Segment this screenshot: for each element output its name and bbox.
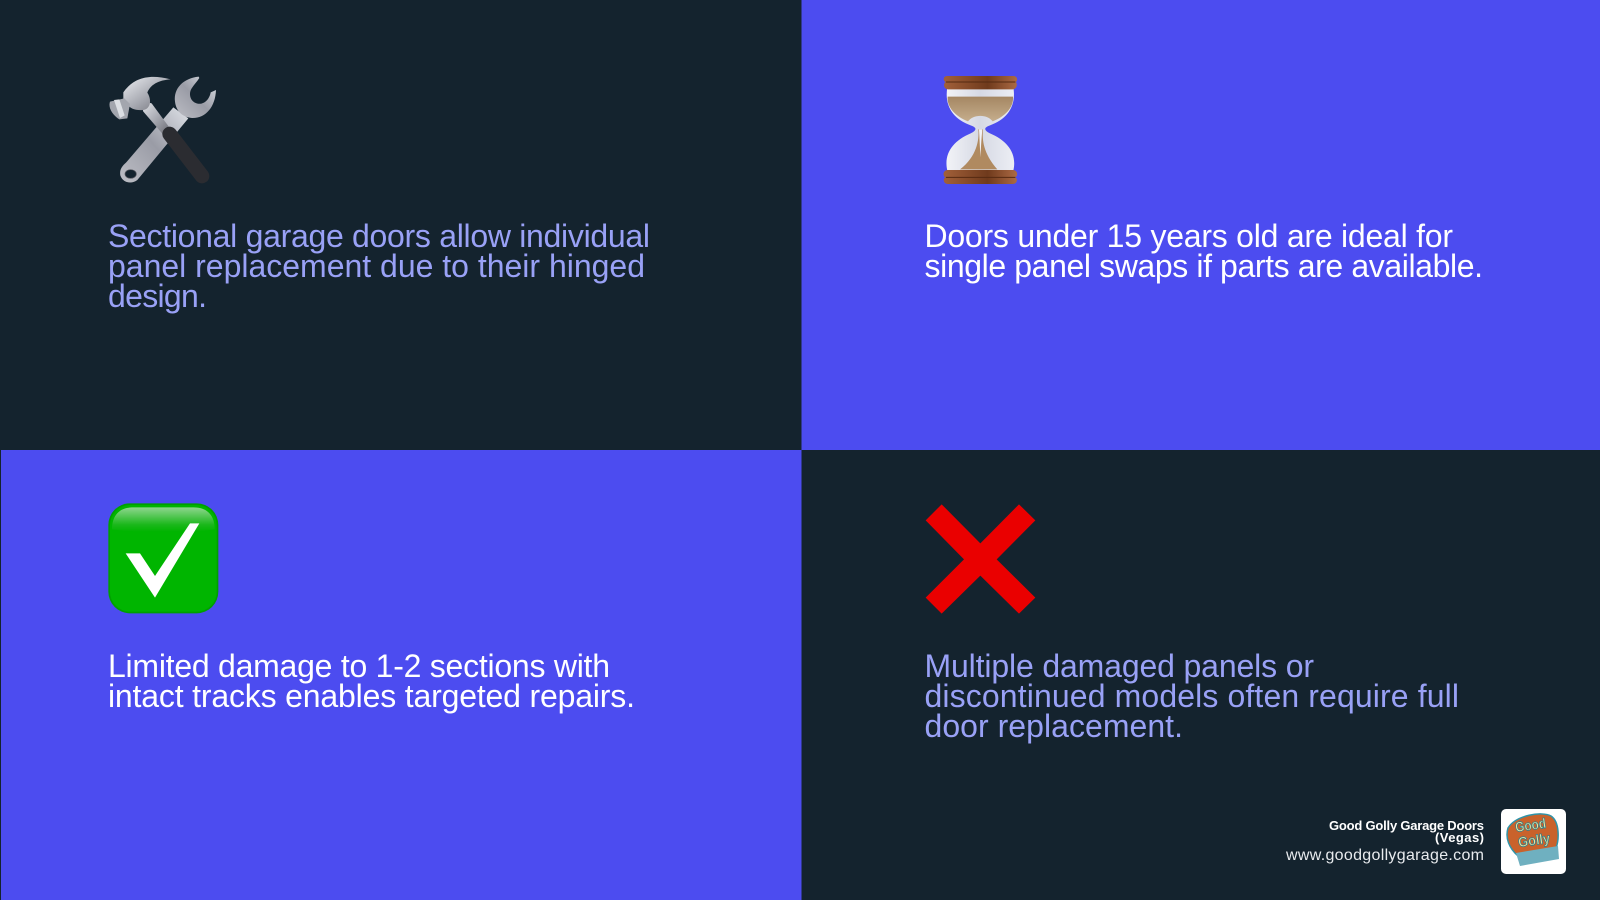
text: bottom right: discontinued models often require full: [924, 678, 1459, 714]
text: top right: Doors under 15 years old are ideal for: [924, 218, 1453, 254]
text: bottom right: Multiple damaged panels or: [924, 648, 1314, 684]
icon: hourglass: [944, 76, 1017, 184]
text: top right: single panel swaps if parts are available.: [924, 248, 1483, 284]
brand name and website: www.goodgollygarage.com: [1285, 847, 1484, 864]
text: top left: panel replacement due to their hinged: [108, 248, 645, 284]
text: bottom left: [108, 648, 635, 714]
text: top left: [108, 218, 650, 314]
text: top right: [924, 218, 1483, 284]
logo card: [1501, 809, 1566, 874]
text: bottom right: door replacement.: [924, 708, 1183, 744]
icon: hammer and wrench: [109, 77, 216, 183]
panel: bottom right: [802, 450, 1600, 900]
panel: top right: [802, 0, 1600, 450]
panel: bottom left: [1, 450, 802, 900]
text: top left: design.: [108, 278, 207, 314]
text: bottom right: [924, 648, 1459, 744]
panel: top left: [1, 0, 802, 450]
logo card: Golly: [1517, 830, 1551, 850]
brand name and website: [1285, 818, 1484, 864]
icon: check mark: [108, 503, 218, 613]
text: top left: Sectional garage doors allow individual: [108, 218, 650, 254]
brand name and website: (Vegas): [1435, 830, 1484, 845]
text: bottom left: intact tracks enables targeted repairs.: [108, 678, 635, 714]
logo card: Good: [1514, 815, 1547, 835]
brand name and website: Good Golly Garage Doors: [1329, 818, 1484, 833]
text: bottom left: Limited damage to 1-2 sections with: [108, 648, 610, 684]
icon: red cross: [926, 504, 1035, 614]
